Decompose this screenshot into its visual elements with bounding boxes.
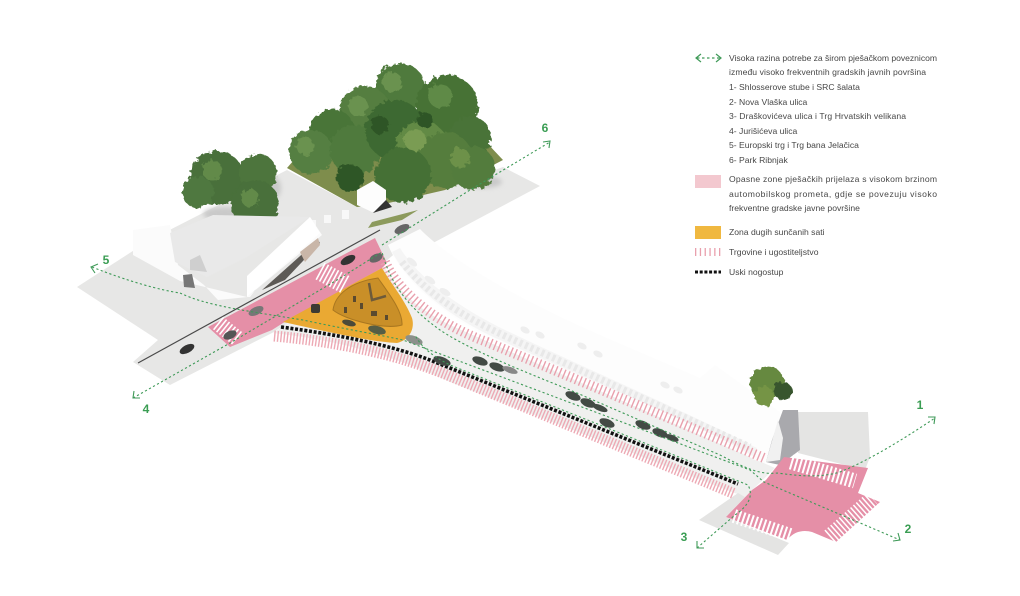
route arrowheads <box>91 141 935 548</box>
ground: northwest crossroad <box>77 167 540 385</box>
trees: left cluster <box>182 151 279 228</box>
legend: route text: Visoka razina potrebe za širom pješačkom poveznicom <box>729 53 937 63</box>
route 5 to 2 <box>92 267 900 540</box>
pink dangerous zone: northwest <box>208 238 387 347</box>
kiosk <box>357 181 392 213</box>
route numbers: 3 <box>681 530 688 544</box>
legend <box>695 53 937 277</box>
legend: shops text: Trgovine i ugostiteljstvo <box>729 247 819 257</box>
legend: route text: 5- Europski trg i Trg bana Jelačica <box>729 140 859 150</box>
legend: route text: 3- Draškovićeva ulica i Trg Hrvatskih velikana <box>729 111 906 121</box>
narrow sidewalk black dots <box>281 327 738 484</box>
small tree <box>750 366 792 406</box>
crosswalks: northwest <box>218 271 346 339</box>
legend: route text: između visoko frekventnih gradskih javnih površina <box>729 67 926 77</box>
legend: pink text: frekventne gradske javne površine <box>729 203 860 213</box>
legend: route text <box>729 53 937 165</box>
legend: route text: 2- Nova Vlaška ulica <box>729 97 808 107</box>
legend: route text: 4- Jurišićeva ulica <box>729 126 798 136</box>
legend: sidewalk text: Uski nogostup <box>729 267 784 277</box>
route numbers: 2 <box>905 522 912 536</box>
legend: route arrow icon <box>696 54 721 62</box>
grass under park <box>287 125 503 207</box>
left building <box>133 215 322 300</box>
legend: shops swatch <box>695 248 721 256</box>
road centre line <box>138 230 380 363</box>
ground: southeast corners <box>699 412 870 555</box>
legend: pink text: automobilskog prometa, gdje se povezuju visoko <box>729 189 937 199</box>
route numbers <box>103 121 924 544</box>
tree shadows <box>203 176 502 221</box>
shops hatch south <box>274 336 735 494</box>
isometric street map <box>77 63 935 555</box>
trees: park cluster <box>289 63 495 203</box>
legend: orange text: Zona dugih sunčanih sati <box>729 227 825 237</box>
legend: route text: 1- Shlosserove stube i SRC šalata <box>729 82 860 92</box>
legend: pink text: Opasne zone pješačkih prijelaza s visokom brzinom <box>729 174 937 184</box>
grass strip <box>368 210 418 228</box>
legend: route text: 6- Park Ribnjak <box>729 155 788 165</box>
route numbers: 1 <box>917 398 924 412</box>
row of buildings <box>388 229 800 465</box>
route 4 to 1 <box>133 252 935 476</box>
legend: pink text <box>729 174 937 213</box>
main street surface <box>273 262 775 497</box>
route numbers: 6 <box>542 121 549 135</box>
shops hatch north <box>385 262 764 458</box>
pink dangerous zone: southeast <box>726 457 880 542</box>
gate columns <box>310 210 349 227</box>
legend: orange swatch <box>695 226 721 239</box>
legend: pink swatch <box>695 175 721 188</box>
cars <box>178 222 680 443</box>
orange sunny zone <box>283 268 413 343</box>
route numbers: 4 <box>143 402 150 416</box>
route numbers: 5 <box>103 253 110 267</box>
crosswalks: southeast <box>734 462 873 537</box>
legend: sidewalk swatch <box>695 270 721 274</box>
route 3 and 6 <box>382 142 750 548</box>
